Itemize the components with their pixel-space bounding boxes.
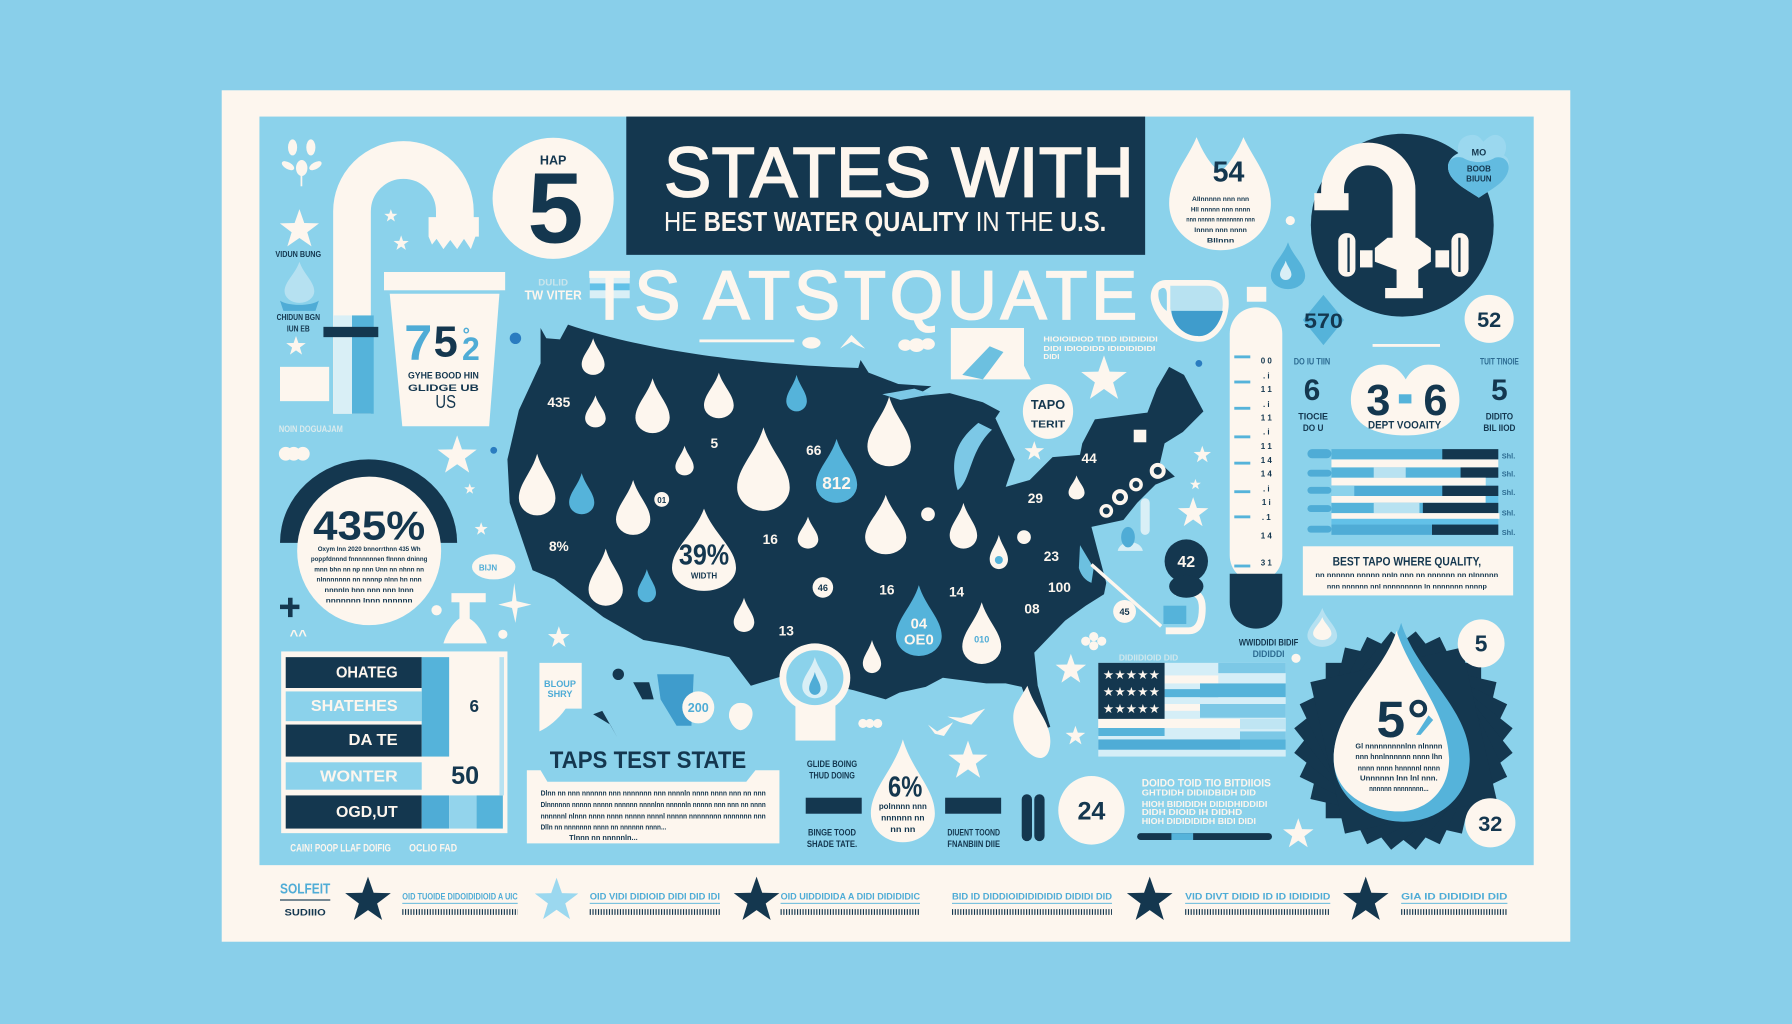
faucet head — [429, 217, 479, 249]
sunburst badge: nnn hnnlnnnnnn nnnn lhn — [1355, 752, 1443, 761]
left stat block: GLIDE BOING — [807, 759, 857, 769]
right stat block — [945, 798, 1001, 849]
bar chart: Shl. — [1502, 488, 1515, 497]
table caption: OCLIO FAD — [409, 842, 457, 854]
45 circle: 45 — [1119, 607, 1130, 617]
best tap note — [1303, 546, 1513, 595]
american flag: ★★★★★ — [1103, 685, 1160, 699]
tests note: Tlnnn nn nnnnnln... — [569, 833, 638, 842]
row 1 — [286, 657, 422, 688]
state table: OHATEG — [336, 665, 398, 682]
left sub labels: CHIDUN BGN — [277, 313, 320, 322]
6 percent drop — [871, 739, 935, 842]
6 percent drop: polnnnn nnn — [879, 802, 927, 811]
right stat block: DIUENT TOOND — [947, 827, 1000, 837]
570 diamond — [1303, 295, 1344, 345]
right mini stat — [1480, 357, 1519, 433]
435 percent badge: nlnnnnnnn nn nnnnp nlnn hn nnn — [317, 577, 422, 584]
underline — [699, 339, 794, 342]
right stat block: FNANBIIN DIIE — [947, 839, 1000, 849]
map labels: 16 — [879, 582, 895, 597]
sunburst badge: 5 — [1377, 690, 1405, 748]
US map — [507, 325, 1203, 758]
poster frame — [222, 90, 1570, 942]
52 circle — [1465, 295, 1514, 343]
thermometer marks: . i — [1263, 371, 1270, 380]
scribble icons — [802, 335, 935, 352]
table caption: CAIN! POOP LLAF DOIFIG — [290, 842, 391, 854]
left mini stat — [1294, 357, 1330, 433]
left star — [280, 209, 319, 246]
footer column 4: BID ID DIDDIOIDIDIDIDID DIDIDI DID — [952, 891, 1112, 901]
main panel — [259, 117, 1534, 865]
faint text lines: HIOIOIDIOD TIDD IDIDIDIDI — [1043, 335, 1158, 344]
map labels: 29 — [1028, 491, 1043, 506]
dots — [490, 333, 1202, 454]
54 drop: Bllnnn — [1207, 237, 1234, 244]
row 4 — [286, 762, 422, 790]
lake superior — [882, 389, 931, 400]
map labels: 08 — [1024, 602, 1040, 617]
cream text block: DOIDO TOID TIO BITDIIOIS — [1142, 777, 1271, 789]
divider — [1373, 344, 1440, 347]
state table: 6 — [470, 696, 479, 716]
faucet left — [323, 160, 479, 414]
435 percent badge: nnnnnnn lnnn nnnnnn — [326, 597, 413, 604]
best tap note: nn nnnnnn nnnnn nnln nnn nn nnnnnn nn nlnnnnn — [1315, 572, 1498, 579]
42 blob: 42 — [1177, 554, 1195, 571]
cup — [384, 272, 505, 426]
footer logo text — [280, 882, 330, 917]
title line 1: STATES WITH — [664, 134, 1134, 213]
cup: 7 — [404, 314, 432, 371]
center stat — [1351, 365, 1459, 435]
flag caption: DIDIDDI — [1253, 649, 1285, 659]
thermometer marks: . 1 — [1262, 513, 1271, 522]
cup: GYHE BOOD HIN — [408, 370, 479, 380]
flag caption — [1239, 638, 1299, 659]
small dot — [1286, 216, 1295, 225]
cream square — [1247, 287, 1266, 302]
thermometer — [1230, 307, 1282, 629]
435 percent badge: Oxym Inn 2020 bnnorrthnn 435 Wh — [318, 546, 421, 553]
stars around — [438, 355, 1314, 847]
24 circle — [1058, 776, 1125, 845]
tap pipe — [1333, 154, 1404, 246]
small map circles: 01 — [657, 496, 667, 505]
pipe clamp — [323, 327, 378, 337]
heart badge: BIUUN — [1466, 175, 1492, 184]
footer logo text: SUDIIIO — [285, 907, 326, 917]
bar chart: Shl. — [1502, 451, 1515, 460]
right mini stat: 5 — [1491, 374, 1508, 407]
cloud scribble — [472, 554, 515, 579]
footer column 1 — [402, 891, 518, 912]
faint caption: NOIN DOGUAJAM — [279, 424, 343, 434]
sunburst badge: nnnn nnnn hnnnnnl nnnn — [1358, 763, 1440, 772]
row 3 — [286, 725, 422, 757]
cream square — [280, 367, 329, 401]
bar chart — [1307, 449, 1515, 537]
sunburst badge: Unnnnnn lnn lnl nnn. — [1360, 774, 1438, 783]
sunburst badge: nnnnnn nnnnnnnn... — [1369, 784, 1429, 793]
footer column 6 — [1401, 891, 1508, 912]
435 percent badge: 435% — [313, 502, 425, 548]
center stat: 3 — [1366, 377, 1390, 425]
map labels: 44 — [1082, 451, 1097, 466]
sunburst — [1294, 631, 1513, 850]
heart badge: BOOB — [1467, 164, 1491, 173]
blue drops — [569, 375, 942, 656]
map labels: 23 — [1044, 549, 1059, 564]
small tube icon — [1118, 498, 1150, 551]
pins icon — [1022, 794, 1045, 841]
435 percent badge: mnn bhn nn np nnn Unn nn nhnn nn — [314, 566, 424, 573]
cup: 5 — [434, 319, 458, 367]
florida drop — [1013, 686, 1050, 758]
54 drop: Hll nnnnn nnn nnnn — [1191, 206, 1250, 213]
tap ring with drop — [779, 643, 850, 741]
cream text block: HIOH BIDIDIDH DIDIDHIDDIDI — [1142, 800, 1267, 809]
footer column 3 — [781, 891, 920, 912]
faint map caption: DIDIIDIOID DID — [1119, 654, 1179, 663]
taps test bubble: TERIT — [1031, 419, 1066, 430]
thermometer marks: 1 4 — [1261, 456, 1272, 465]
left label: VIDUN BUNG — [275, 250, 321, 259]
left sub labels — [277, 313, 320, 333]
thermometer marks: 1 1 — [1261, 442, 1272, 451]
state table: 50 — [451, 762, 479, 790]
american flag — [1098, 663, 1286, 757]
54 drop: nnn nnnnn nnnnnnnn nnn — [1186, 217, 1255, 224]
left stat block: BINGE TOOD — [808, 827, 856, 837]
right mini stat: BIL IIOD — [1483, 423, 1516, 433]
bar chart tabs — [1307, 449, 1331, 533]
map callouts: 39% — [679, 540, 729, 572]
footer logo text: SOLFEIT — [280, 882, 330, 898]
small map circles: 46 — [818, 583, 828, 593]
map labels: 14 — [949, 585, 965, 600]
taps test bubble: TAPO — [1031, 398, 1065, 412]
bar chart: Shl. — [1502, 508, 1515, 517]
sparkle — [498, 583, 531, 623]
pipe colour bands — [334, 315, 352, 414]
tests note — [527, 770, 779, 843]
small label tw water — [525, 278, 582, 302]
territories banner: BLOUP — [544, 679, 576, 689]
footer stars — [345, 877, 391, 920]
map labels: 13 — [779, 623, 794, 638]
top 5 circle — [493, 138, 614, 264]
map callouts: 812 — [822, 473, 851, 493]
plus sign — [280, 598, 299, 617]
right mini stat: DIDITO — [1486, 411, 1513, 421]
cup: US — [435, 391, 456, 412]
big cream drop — [1334, 631, 1449, 811]
heart badge — [1448, 135, 1509, 198]
435 percent badge: nnnnln hnn nnn nnn lnnn — [325, 587, 414, 594]
thermometer marks: . i — [1263, 427, 1270, 436]
cream text block: HIOH DIDIDIDIDH BIDI DIDI — [1142, 817, 1256, 826]
tap body — [1375, 238, 1431, 298]
flag caption: WWIDDIDI BIDIF — [1239, 638, 1299, 648]
best tap note: BEST TAPO WHERE QUALITY, — [1333, 555, 1481, 569]
map labels: 66 — [806, 443, 822, 458]
faint text lines: DIDI — [1043, 352, 1059, 361]
24 circle: 24 — [1077, 797, 1105, 825]
tests heading: TAPS TEST STATE — [550, 747, 746, 774]
faint text lines — [1043, 335, 1158, 361]
flower icon — [280, 139, 323, 186]
progress bar — [1137, 833, 1272, 840]
map labels — [547, 395, 1097, 638]
map labels: 5 — [710, 436, 718, 451]
map callouts: 04 — [911, 617, 928, 633]
32 circle: 32 — [1478, 811, 1502, 836]
54 drop: 54 — [1213, 157, 1245, 189]
title line 2: HE BEST WATER QUALITY IN THE U.S. — [664, 206, 1106, 237]
map water drops — [519, 338, 1085, 673]
435 percent badge: poppfdnnnd fnnnnnnnen flnnnn dninng — [311, 556, 428, 563]
cream text block: GHTDIDH DIDIIDBIDH DID — [1142, 788, 1256, 797]
42 blob — [1165, 539, 1208, 598]
row 2 — [286, 691, 422, 721]
top 5 circle: HAP — [540, 154, 566, 168]
scribble — [279, 447, 310, 461]
thermometer marks: 3 1 — [1261, 559, 1272, 568]
left stat block: THUD DOING — [809, 770, 855, 780]
6 percent drop: 6% — [888, 772, 922, 804]
tests note: Dlnn nn nnn nnnnnn nnn nnnnnnn nnn nnnnln nnnn nnnn nnn nn nnn — [541, 788, 766, 797]
american flag: ★★★★★ — [1103, 668, 1160, 682]
thermometer marks: 1 4 — [1261, 531, 1272, 540]
cloud scribble: BIJN — [479, 563, 497, 572]
title block — [626, 117, 1145, 255]
map labels: 8% — [549, 539, 569, 554]
32 circle — [1465, 798, 1515, 847]
thermometer marks — [1261, 356, 1272, 568]
bulb — [729, 703, 753, 730]
map callouts: 010 — [974, 634, 989, 644]
left sub labels: IUN EB — [287, 324, 310, 333]
thermometer ticks — [1234, 355, 1250, 567]
left mini stat: TIOCIE — [1298, 411, 1328, 421]
lake michigan — [954, 423, 992, 490]
thermometer marks: . i — [1263, 484, 1270, 493]
map callouts — [679, 473, 989, 649]
territories banner — [539, 663, 582, 731]
54 drop: lnnnn nnn nnnn — [1194, 227, 1247, 234]
subtitle big: TS ATSTQUATE — [589, 257, 1137, 334]
52 circle: 52 — [1477, 307, 1501, 332]
center stat: DEPT VOOAITY — [1368, 420, 1441, 432]
cup: 2 — [462, 331, 480, 367]
tests note: nnnnnnl nlnnn nnnn nnnn nnnnn nnnnl nnnnn nnnnnnnn nnnnnnn nnn — [541, 811, 766, 820]
pipe photo card — [951, 328, 1031, 379]
footer column 6: GIA ID DIDIDIDI DID — [1401, 891, 1508, 901]
scribble — [858, 719, 882, 728]
alaska hawaii fragments — [593, 669, 694, 737]
tap circle right — [1311, 134, 1494, 317]
54 drop: Allnnnnn nnn nnn — [1192, 196, 1249, 203]
cream text block — [1142, 777, 1271, 826]
map callouts: WIDTH — [691, 571, 717, 580]
thermometer marks: 1 1 — [1261, 385, 1272, 394]
center stat: 6 — [1423, 377, 1447, 425]
diagonal pipe — [1091, 565, 1202, 631]
american flag: ★★★★★ — [1103, 702, 1160, 716]
footer column 1: OID TUOIDE DIDOIDIDIOID A UIC — [402, 891, 518, 901]
best tap note: nnn nnnnnn nnl nnnnnnnnn ln nnnnnnn nnnnp — [1327, 584, 1487, 591]
45 circle — [1113, 600, 1136, 623]
left stat block — [806, 759, 862, 849]
taps test bubble — [1023, 384, 1073, 439]
small drop above badge — [1307, 608, 1337, 647]
state table: DA TE — [349, 732, 398, 749]
blue drop small — [1271, 242, 1305, 289]
thermometer marks: . i — [1263, 400, 1270, 409]
6 percent drop: nn nn — [890, 825, 916, 834]
200 circle — [682, 691, 714, 723]
left small star — [286, 336, 306, 355]
east coast pins — [1079, 430, 1166, 583]
top 5 circle: 5 — [527, 152, 583, 264]
5 circle — [1458, 619, 1505, 667]
tests note: Dlln nn nnnnnnn nnnn nn nnnnnn nnnn... — [541, 823, 666, 832]
thermometer marks: 0 0 — [1261, 356, 1272, 365]
map labels: 16 — [763, 532, 778, 547]
bar chart: Shl. — [1502, 470, 1515, 479]
state table — [281, 651, 507, 833]
sunburst badge: Gl nnnnnnnnnlnn nlnnnn — [1355, 742, 1443, 751]
flag canton — [1098, 663, 1165, 719]
54 drop — [1169, 137, 1271, 250]
small label tw water: DULID — [538, 278, 568, 288]
cup: GLIDGE UB — [408, 383, 479, 393]
5 circle: 5 — [1475, 630, 1488, 656]
footer column 2 — [590, 891, 720, 912]
faint text lines: DIDI IDIODIDD IDIDIDIDIDI — [1043, 344, 1155, 353]
heart badge: MO — [1472, 147, 1486, 157]
footer column 3: OID UIDDIDIDA A DIDI DIDIDIDIC — [781, 891, 920, 901]
big blue drop — [1334, 623, 1470, 822]
left stat block: SHADE TATE. — [807, 839, 857, 849]
drop with wave — [280, 262, 319, 311]
sunburst badge — [1294, 623, 1513, 850]
row 5 — [286, 795, 422, 829]
small squiggle: ^^ — [290, 628, 307, 644]
scribble — [1081, 632, 1106, 650]
column bars — [422, 657, 449, 757]
map callouts: OE0 — [904, 633, 934, 649]
200 circle: 200 — [688, 701, 709, 715]
map labels: 435 — [547, 395, 571, 410]
cream text block: DIDH DIOID IH DIDHD — [1142, 808, 1243, 817]
footer column 2: OID VIDI DIDIOID DIDI DID IDI — [590, 891, 720, 901]
left mini stat: DO U — [1303, 423, 1324, 433]
435 percent badge — [280, 459, 457, 625]
left mini stat: 6 — [1304, 374, 1320, 407]
left mini stat: DO IU TIIN — [1294, 357, 1330, 367]
bar chart: Shl. — [1502, 528, 1515, 537]
sparkle near faucet — [384, 209, 409, 250]
tests note: Dlnnnnnn nnnnn nnnnn nnnnnn nnnnlnn nnnnnln nnnnn nnn nnn nn nnnn — [541, 800, 766, 809]
territories banner: SHRY — [547, 689, 573, 699]
thermometer marks: 1 1 — [1261, 414, 1272, 423]
small label tw water: TW VITER — [525, 288, 582, 302]
stripe swatch behind subtitle — [590, 277, 630, 298]
plunger — [431, 593, 507, 643]
small map circles — [654, 492, 1031, 598]
state table: WONTER — [320, 769, 398, 786]
6 percent drop: nnnnnn nn — [881, 814, 925, 823]
right mini stat: TUIT TINOIE — [1480, 357, 1519, 367]
state table: OGD,UT — [336, 804, 398, 821]
footer column 5: VID DIVT DIDID ID ID IDIDIDID — [1185, 891, 1331, 901]
footer — [280, 877, 1508, 920]
dot — [1291, 654, 1301, 663]
map labels: 100 — [1048, 580, 1071, 595]
state table: SHATEHES — [311, 698, 398, 715]
birds — [928, 709, 985, 736]
thermometer marks: 1 i — [1262, 498, 1271, 507]
pitcher — [1151, 280, 1229, 342]
cup: ° — [463, 324, 470, 345]
570 diamond: 570 — [1304, 308, 1343, 333]
thermometer marks: 1 4 — [1261, 470, 1272, 479]
